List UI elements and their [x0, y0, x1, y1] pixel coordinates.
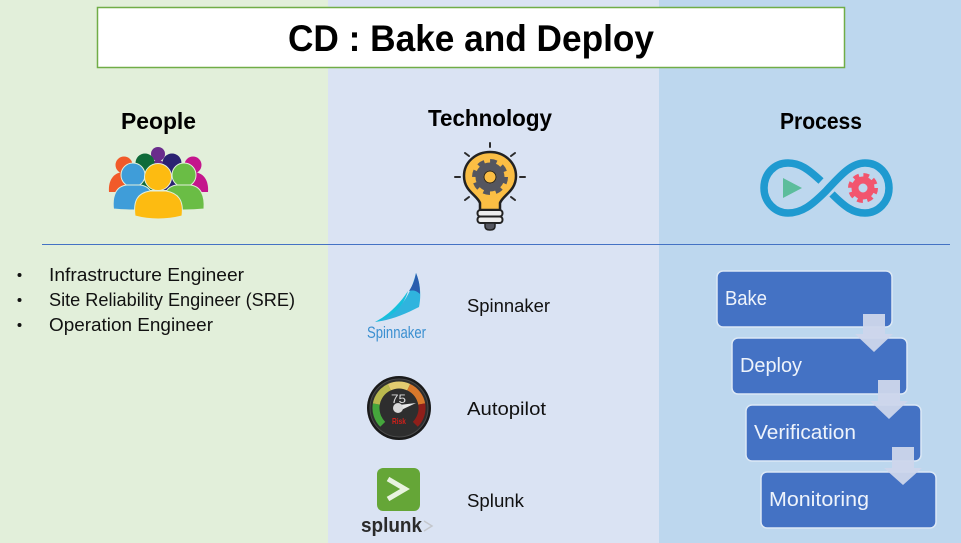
label: Spinnaker: Spinnaker — [467, 295, 550, 316]
process flow: staggered steps — [717, 271, 936, 528]
step: Verification: Verification — [754, 422, 856, 444]
step: Bake: Bake — [725, 288, 767, 310]
icon: group of people — [109, 147, 208, 219]
icon: light bulb with gear — [455, 143, 525, 230]
step: Deploy — [732, 338, 907, 394]
step: Verification — [746, 405, 921, 461]
panel: people background — [0, 0, 328, 543]
step: Bake — [717, 271, 892, 327]
icon: infinity loop with play and gear — [764, 163, 889, 213]
text block: people roles: Operation Engineer — [49, 314, 213, 335]
icon: Splunk logo: splunk — [361, 514, 423, 537]
arrow: Deploy to Verification — [870, 380, 908, 419]
heading: People: People — [121, 108, 196, 134]
arrow: Bake to Deploy — [855, 314, 893, 352]
step: Monitoring: Monitoring — [769, 489, 869, 511]
heading: Technology: Technology — [428, 105, 552, 131]
text block: people roles: Site Reliability Engineer (SRE) — [49, 289, 295, 310]
icon: Spinnaker logo: Spinnaker — [367, 323, 426, 342]
divider line — [42, 244, 950, 246]
icon: Spinnaker logo — [367, 273, 426, 342]
panel: process background — [659, 0, 961, 543]
arrow: Verification to Monitoring — [884, 447, 922, 485]
step: Monitoring — [761, 472, 936, 528]
label: Autopilot: Autopilot — [467, 398, 546, 419]
panel: technology background — [328, 0, 659, 543]
step: Deploy: Deploy — [740, 355, 802, 377]
icon: Autopilot risk gauge — [367, 376, 431, 440]
icon: Splunk logo — [361, 468, 432, 537]
text block: people roles: Infrastructure Engineer — [49, 264, 244, 285]
text block: people roles — [18, 264, 295, 335]
heading: Process: Process — [780, 108, 862, 134]
icon: Autopilot risk gauge: 75 — [391, 392, 406, 406]
label: Splunk: Splunk — [467, 490, 525, 511]
title: CD : Bake and Deploy — [288, 18, 654, 59]
title — [98, 8, 844, 68]
icon: Autopilot risk gauge: Risk — [392, 416, 406, 426]
